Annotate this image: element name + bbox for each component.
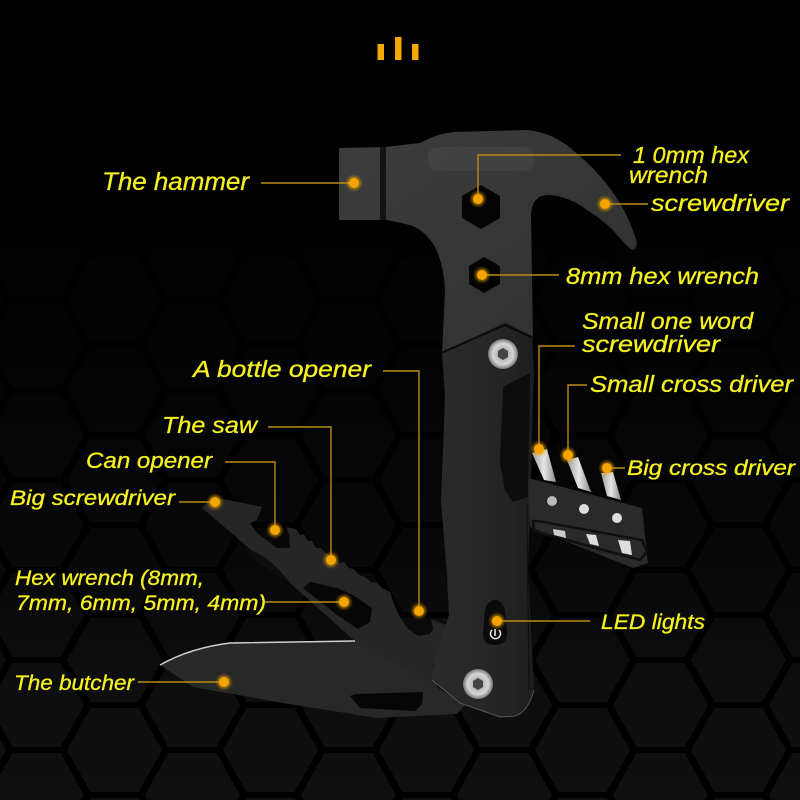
label: hex wrench sizes: 7mm, 6mm, 5mm, 4mm) bbox=[16, 592, 266, 615]
label: small one word screwdriver: Small one word bbox=[582, 308, 754, 334]
handle screws bbox=[463, 339, 518, 699]
hexagon background pattern bbox=[0, 571, 800, 800]
hammer head and neck bbox=[339, 130, 637, 355]
icon: three orange bars bbox=[378, 37, 418, 60]
label: the saw: The saw bbox=[162, 412, 259, 438]
knife blade bbox=[160, 641, 465, 718]
driver bits bbox=[532, 449, 621, 500]
handle bbox=[432, 322, 534, 717]
label: 10mm hex wrench: 1 0mm hex bbox=[633, 142, 751, 168]
label: screwdriver: screwdriver bbox=[651, 190, 791, 216]
label: a bottle opener: A bottle opener bbox=[191, 356, 373, 382]
label: hex wrench sizes: Hex wrench (8mm, bbox=[15, 567, 204, 590]
label: the butcher: The butcher bbox=[14, 672, 135, 695]
callout dots bbox=[208, 176, 614, 689]
label: 8mm hex wrench: 8mm hex wrench bbox=[566, 263, 759, 289]
leader lines bbox=[138, 155, 648, 682]
label: can opener: Can opener bbox=[86, 448, 214, 473]
label: small one word screwdriver bbox=[582, 308, 754, 357]
multi-tool illustration bbox=[160, 130, 648, 718]
label: small cross driver: Small cross driver bbox=[590, 371, 794, 397]
label: 10mm hex wrench: wrench bbox=[629, 162, 708, 188]
label: The hammer: The hammer bbox=[102, 168, 251, 196]
label: big cross driver: Big cross driver bbox=[627, 457, 796, 480]
label: 10mm hex wrench bbox=[629, 142, 751, 188]
label: LED lights: LED lights bbox=[601, 611, 706, 634]
label: big screwdriver: Big screwdriver bbox=[10, 487, 176, 510]
bit holder bbox=[528, 478, 648, 568]
label: hex wrench sizes bbox=[15, 567, 266, 615]
LED switch bbox=[483, 600, 507, 645]
tool arm with saw and wrench bbox=[202, 497, 446, 700]
label: small one word screwdriver: screwdriver bbox=[582, 331, 722, 357]
